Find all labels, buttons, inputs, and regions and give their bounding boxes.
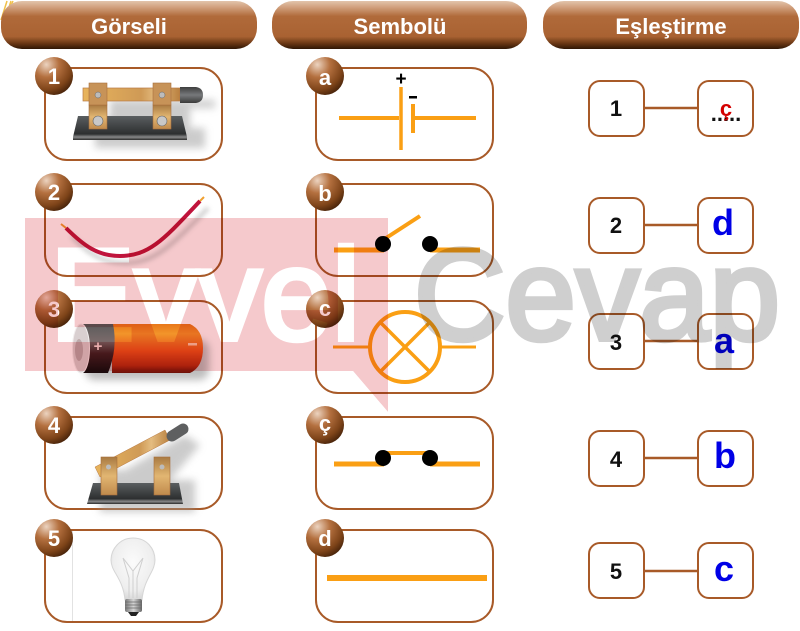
column header: Sembolü: Sembolü: [354, 14, 446, 39]
symbol: battery: +: [395, 69, 407, 90]
panel: görsel 5 bulb: [45, 530, 222, 622]
icon: closed knife switch: [73, 83, 215, 148]
column header: Sembolü: [272, 1, 527, 49]
label badge a: a: [319, 65, 332, 90]
match row 1: 1: [610, 96, 622, 121]
label badge d: d: [318, 526, 332, 551]
panel: görsel 1 closed switch: [45, 68, 222, 160]
match row 5: [589, 543, 753, 598]
symbol: open switch: [334, 216, 480, 252]
label badge a: [306, 57, 344, 95]
icon: red wire: [61, 197, 208, 263]
match row 1: .....: [711, 101, 741, 126]
match row 4: b: [714, 435, 736, 476]
label badge ç: ç: [319, 411, 331, 436]
symbol: closed switch: [334, 450, 480, 466]
label badge 3: [35, 290, 73, 328]
match row 2: 2: [610, 213, 622, 238]
panel: sembol d wire symbol: [316, 530, 493, 622]
match row 5: c: [714, 548, 734, 589]
panel: görsel 2 wire: [45, 184, 222, 276]
icon: battery: +: [94, 338, 103, 355]
label badge b: [306, 173, 344, 211]
icon: battery: [72, 324, 209, 380]
label badge 2: [35, 173, 73, 211]
label badge 1: 1: [48, 64, 60, 89]
icon: open knife switch: [87, 429, 200, 512]
match row 2: [589, 198, 753, 253]
icon: light bulb: [111, 538, 155, 616]
match row 4: [589, 431, 753, 486]
panel: sembol b open switch symbol: [316, 184, 493, 276]
watermark: Evvel Cevap: Cevap: [414, 222, 780, 368]
label badge d: [306, 519, 344, 557]
panel: sembol ç closed switch symbol: [316, 417, 493, 509]
label badge 3: 3: [48, 297, 60, 322]
match row 5: 5: [610, 559, 622, 584]
symbol: lamp: [333, 312, 476, 382]
label badge 4: [35, 406, 73, 444]
panel: sembol c lamp symbol: [316, 301, 493, 393]
column header: Eşleştirme: [543, 1, 799, 49]
column header: Görseli: Görseli: [91, 14, 167, 39]
label badge c: c: [319, 296, 331, 321]
label badge ç: [306, 406, 344, 444]
panel: görsel 3 battery: [45, 301, 222, 393]
watermark: Evvel Cevap: [25, 218, 780, 412]
symbol: straight wire: [327, 575, 487, 581]
corner decoration: [1, 1, 13, 20]
match row 2: d: [712, 202, 734, 243]
match row 1: [589, 81, 753, 136]
match row 1: ç: [720, 96, 732, 121]
match row 3: a: [714, 320, 735, 361]
label badge 1: [35, 57, 73, 95]
label badge c: [306, 290, 344, 328]
label badge 5: [35, 519, 73, 557]
label badge 4: 4: [48, 413, 61, 438]
panel: görsel 4 open switch: [45, 417, 222, 512]
match row 3: 3: [610, 330, 622, 355]
match row 3: [589, 314, 753, 369]
label badge b: b: [318, 181, 332, 206]
label badge 5: 5: [48, 526, 60, 551]
panel: sembol a battery symbol: [316, 68, 493, 160]
label badge 2: 2: [48, 180, 60, 205]
symbol: battery: [339, 69, 476, 150]
match row 4: 4: [610, 447, 623, 472]
column header: Eşleştirme: Eşleştirme: [615, 14, 727, 39]
column header: Görseli: [1, 1, 257, 49]
